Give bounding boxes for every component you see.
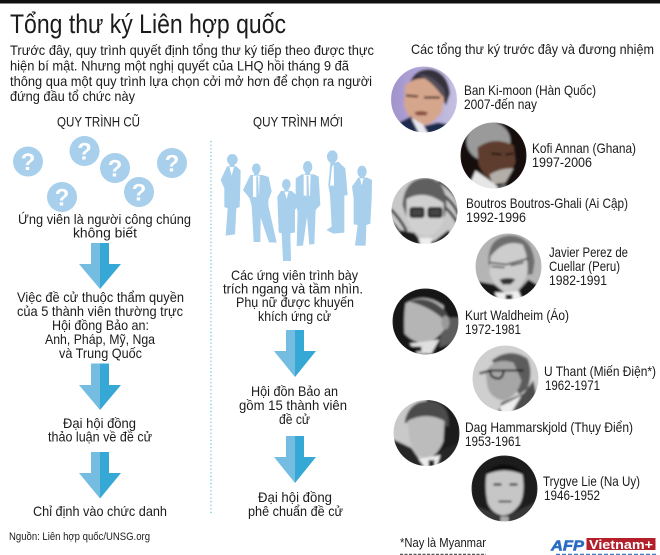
text: appointment: Chỉ định vào chức danh [33, 503, 167, 519]
arrow 1 new [274, 330, 316, 377]
text: candidates present: Phụ nữ được khuyến [236, 294, 354, 310]
logo: AFP Vietnam+: Vietnam+ [589, 537, 653, 552]
icons: question marks: ? [108, 156, 122, 182]
text: security council nominates: đề cử [279, 411, 310, 427]
text: Dag Hammarskjold: 1953-1961 [465, 433, 521, 449]
portrait: Kofi Annan [460, 122, 528, 190]
text: general assembly discusses [48, 415, 152, 444]
text: Ban Ki-moon: 2007-đến nay [464, 96, 537, 112]
text: Trygve Lie: 1946-1952 [544, 487, 600, 503]
arrow 1 old [79, 243, 121, 289]
text: Kurt Waldheim: Kurt Waldheim (Áo) [465, 307, 569, 323]
intro text block: hiện bí mật. Nhưng một nghị quyết của LHQ hồi tháng 9 đã [10, 58, 349, 74]
icon: candidates silhouettes [221, 150, 372, 261]
text: Kofi Annan: 1997-2006 [532, 154, 592, 170]
text: Javier Perez de Cuellar: Cuellar (Peru) [549, 258, 620, 274]
source: Nguồn: Liên hợp quốc/UNSG.org [9, 531, 150, 543]
footnote: *Nay là Myanmar [400, 535, 487, 550]
arrow 2 new [274, 436, 316, 483]
text: general assembly discusses: thảo luận về đề cử [48, 428, 152, 444]
text: general assembly discusses: Đại hội đồng [63, 415, 136, 431]
logo: AFP Vietnam+: AFP [550, 538, 585, 554]
text: security council nominates: gồm 15 thành viên [239, 397, 347, 413]
text: nomination by P5: Hội đồng Bảo an: [52, 317, 149, 333]
text: unknown candidates: Ứng viên là người công chúng [18, 211, 191, 227]
heading: old process: QUY TRÌNH CŨ [57, 114, 140, 130]
intro text block: thông qua một quy trình lựa chọn cởi mở hơn để chọn ra người [10, 73, 372, 89]
portrait: Boutros Boutros-Ghali [390, 177, 458, 245]
title: Tổng thư ký Liên hợp quốc [10, 9, 286, 39]
text: Boutros Boutros-Ghali [466, 195, 628, 225]
portrait: Javier Perez de Cuellar [474, 232, 542, 300]
text: Kofi Annan: Kofi Annan (Ghana) [532, 140, 636, 156]
arrow 2 old [79, 364, 121, 410]
text: candidates present: trích ngang và tầm nhìn. [223, 280, 363, 296]
portrait: U Thant [472, 344, 540, 412]
intro text block: đứng đầu tổ chức này [10, 88, 135, 104]
intro text block: Trước đây, quy trình quyết định tổng thư ký tiếp theo được thực [10, 42, 374, 58]
cut-off line under footnote [400, 554, 486, 555]
text: candidates present: Các ứng viên trình bày [231, 267, 358, 283]
icons: question marks: ? [165, 150, 179, 178]
arrow 3 old [79, 452, 121, 498]
text: Kurt Waldheim [465, 307, 569, 337]
portrait: Ban Ki-moon [390, 66, 458, 134]
portrait: Trygve Lie [470, 454, 538, 522]
icons: question marks [13, 136, 187, 212]
text: U Thant: 1962-1971 [545, 377, 600, 393]
text: Dag Hammarskjold [465, 419, 633, 449]
logo: AFP Vietnam+ [550, 537, 656, 554]
text: assembly approves: phê chuẩn đề cử [248, 503, 343, 519]
icons: question marks: ? [132, 180, 146, 206]
text: Kofi Annan [532, 140, 636, 170]
text: Trygve Lie [543, 473, 640, 503]
text: Ban Ki-moon [464, 82, 596, 112]
portrait: Dag Hammarskjold [392, 399, 460, 467]
text: candidates present [223, 267, 363, 324]
column divider [210, 141, 212, 513]
intro text block [10, 42, 374, 104]
text: U Thant [544, 363, 656, 393]
text: security council nominates [239, 383, 347, 427]
text: Javier Perez de Cuellar [549, 244, 628, 288]
text: security council nominates: Hội đồn Bảo an [251, 383, 338, 399]
icons: question marks: ? [21, 149, 35, 176]
text: nomination by P5: và Trung Quốc [59, 345, 142, 361]
text: assembly approves: Đại hội đồng [258, 489, 332, 505]
text: Boutros Boutros-Ghali: 1992-1996 [466, 209, 526, 225]
icons: question marks: ? [55, 184, 69, 212]
text: nomination by P5: của 5 thành viên thường trực [17, 303, 183, 319]
text: Boutros Boutros-Ghali: Boutros Boutros-Ghali (Ai Cập) [466, 195, 628, 211]
text: Javier Perez de Cuellar: Javier Perez de [549, 244, 628, 260]
portrait: Kurt Waldheim [392, 288, 460, 356]
text: unknown candidates: không biết [73, 226, 137, 240]
text: candidates present: khích ứng cử [258, 308, 331, 324]
text: nomination by P5 [17, 289, 184, 361]
text: unknown candidates [18, 211, 191, 240]
text: nomination by P5: Anh, Pháp, Mỹ, Nga [45, 331, 155, 347]
text: Kurt Waldheim: 1972-1981 [465, 321, 521, 337]
text: assembly approves [248, 489, 343, 519]
text: nomination by P5: Việc đề cử thuộc thẩm quyền [17, 289, 184, 305]
heading: new process: QUY TRÌNH MỚI [253, 114, 343, 130]
text: Javier Perez de Cuellar: 1982-1991 [549, 272, 607, 288]
text: Trygve Lie: Trygve Lie (Na Uy) [543, 473, 640, 489]
text: Ban Ki-moon: Ban Ki-moon (Hàn Quốc) [464, 82, 596, 98]
text: Dag Hammarskjold: Dag Hammarskjold (Thụy Điển) [465, 419, 633, 435]
icons: question marks: ? [77, 138, 92, 166]
